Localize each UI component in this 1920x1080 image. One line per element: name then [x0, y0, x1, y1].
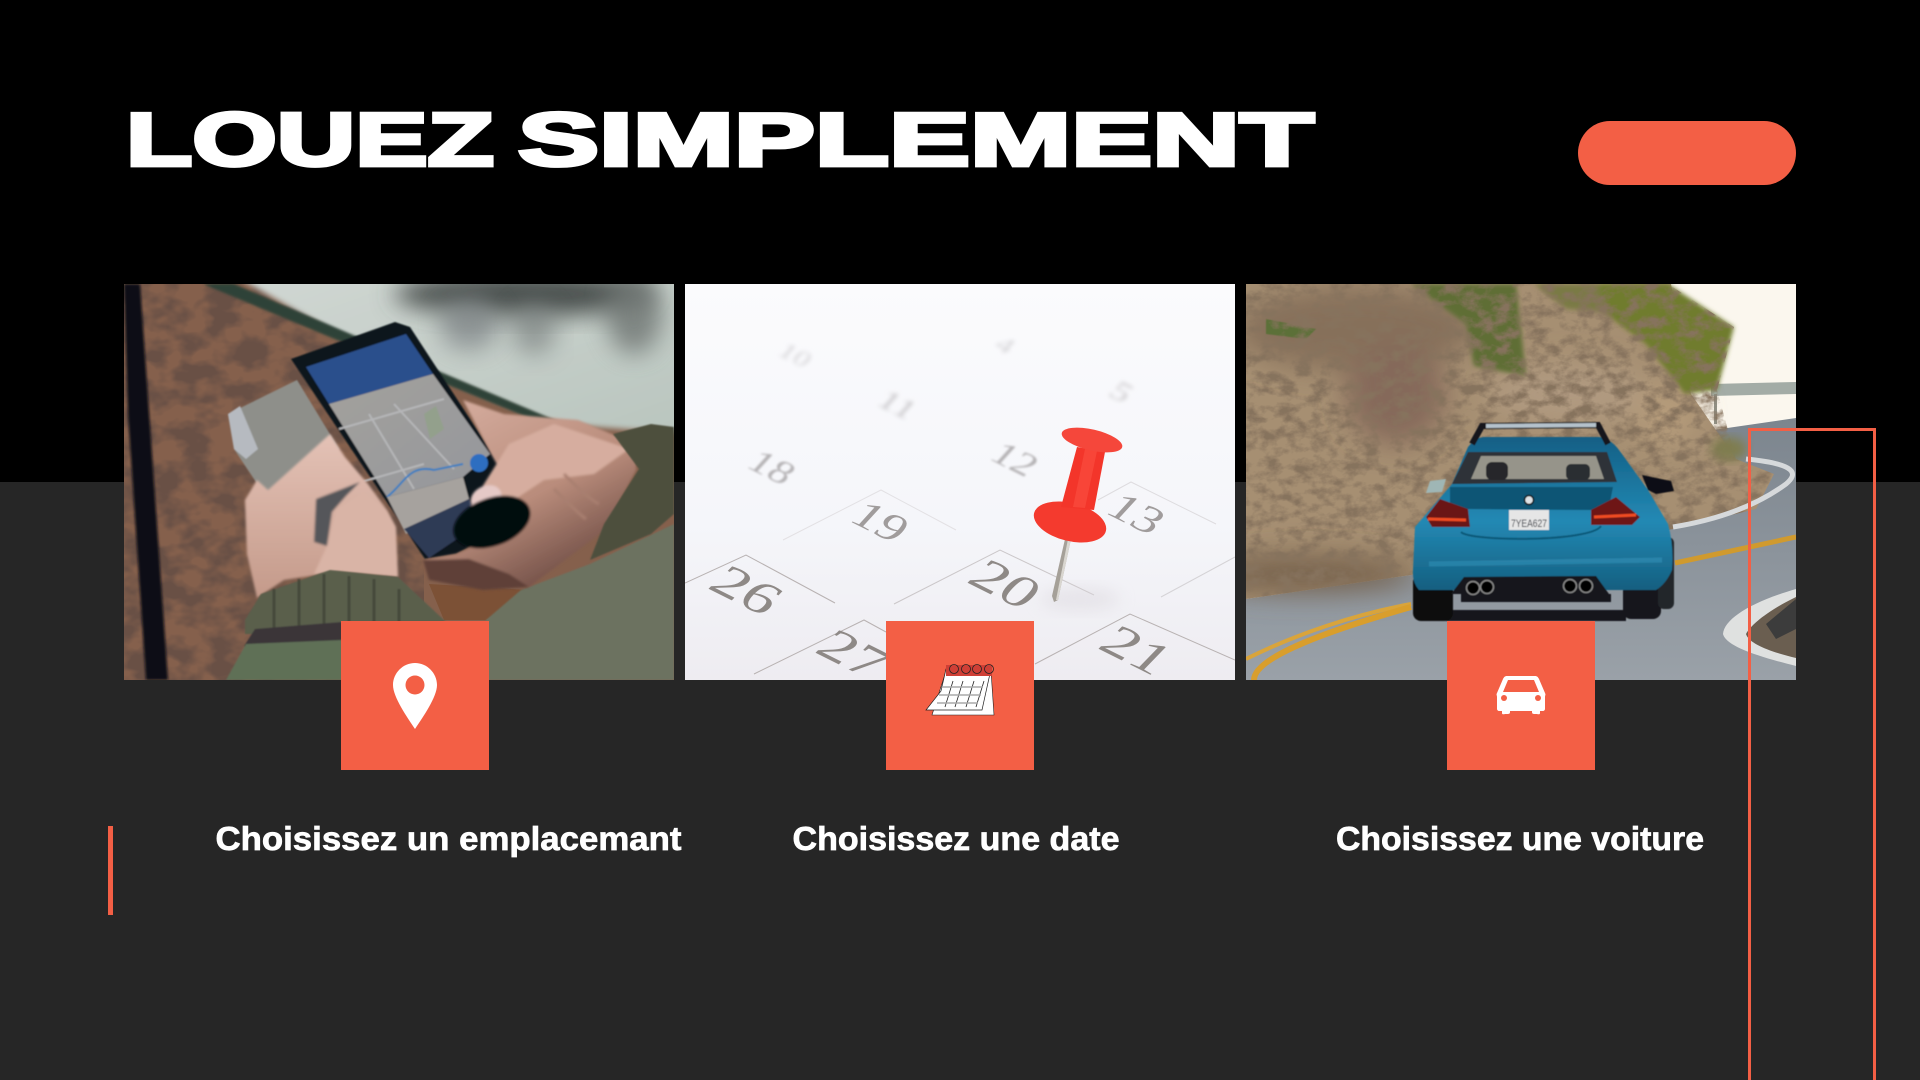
car: 7YEA627: [1511, 518, 1547, 530]
label: location step: Choisissez un emplacemant: [216, 820, 682, 857]
road markings: [1673, 459, 1793, 527]
trees: [1411, 284, 1734, 394]
dry grass: [1196, 287, 1696, 592]
label: car step: Choisissez une voiture: [1336, 820, 1704, 857]
photo: calendar with red push pin: [685, 284, 1235, 680]
rail: [203, 284, 564, 426]
coral pill: [1578, 121, 1796, 185]
kerb: [1723, 589, 1796, 666]
calendar numbers: [698, 332, 1185, 689]
body: [1413, 437, 1672, 590]
trunk: [1450, 487, 1613, 510]
cuffs: [590, 424, 674, 560]
calendar numbers: 5: [1102, 376, 1140, 408]
phone: [291, 322, 532, 559]
icon tile: car: [1447, 621, 1595, 770]
brown patch behind arm: [429, 584, 529, 620]
wallet: [228, 380, 339, 509]
calendar numbers: 11: [870, 385, 924, 425]
calendar numbers: 13: [1097, 485, 1175, 543]
sky: [1246, 284, 1796, 680]
title: SIMPLEMENT: [518, 98, 1314, 182]
calendar numbers: 26: [698, 555, 795, 625]
calendar numbers: 4: [989, 332, 1021, 359]
right hand: [423, 400, 636, 590]
cliff: [1246, 284, 1774, 599]
pin: [1030, 423, 1125, 602]
guard rail: [1711, 382, 1796, 396]
photo: blue BMW on winding road: [1246, 284, 1796, 680]
calendar numbers: 10: [772, 339, 818, 373]
taillights: [1426, 499, 1470, 527]
icon tile: calendar: [886, 621, 1034, 770]
licence plate: [1509, 510, 1549, 530]
calendar numbers: 19: [841, 493, 919, 551]
autumn leaves: [124, 284, 674, 680]
road: [1246, 418, 1796, 680]
pin shadow: [1040, 587, 1120, 611]
wheels: [1413, 574, 1453, 621]
calendar grid lines: [685, 482, 1235, 674]
calendar numbers: 18: [739, 443, 804, 492]
fur blur: [394, 272, 654, 316]
left accent bar: [108, 826, 113, 915]
title: [126, 98, 1316, 182]
car shadow: [1446, 610, 1626, 621]
bumper crease: [1461, 526, 1601, 539]
calendar numbers: 20: [957, 549, 1054, 619]
diffuser: [1451, 576, 1609, 594]
dark device shadow: [446, 486, 538, 558]
grey blurred wall: [214, 264, 694, 434]
car: [1413, 425, 1674, 621]
icon tile: location pin: [341, 621, 489, 770]
decorative coral frame line: [1748, 428, 1876, 1080]
calendar numbers: 12: [982, 435, 1047, 484]
mirrors: [1426, 479, 1446, 493]
sleeve right: [464, 524, 674, 680]
title: LOUEZ: [126, 98, 494, 182]
spoiler: [1472, 425, 1608, 444]
dark post: [124, 284, 168, 680]
badge: [1524, 496, 1534, 504]
label: date step: Choisissez une date: [792, 820, 1120, 857]
shrub: [1711, 437, 1747, 461]
photo: hands holding phone with map: [124, 284, 674, 680]
left hand: [245, 434, 398, 598]
small plants: [1266, 319, 1316, 339]
lower dark background band: [0, 482, 1920, 1080]
rear window: [1452, 452, 1617, 484]
